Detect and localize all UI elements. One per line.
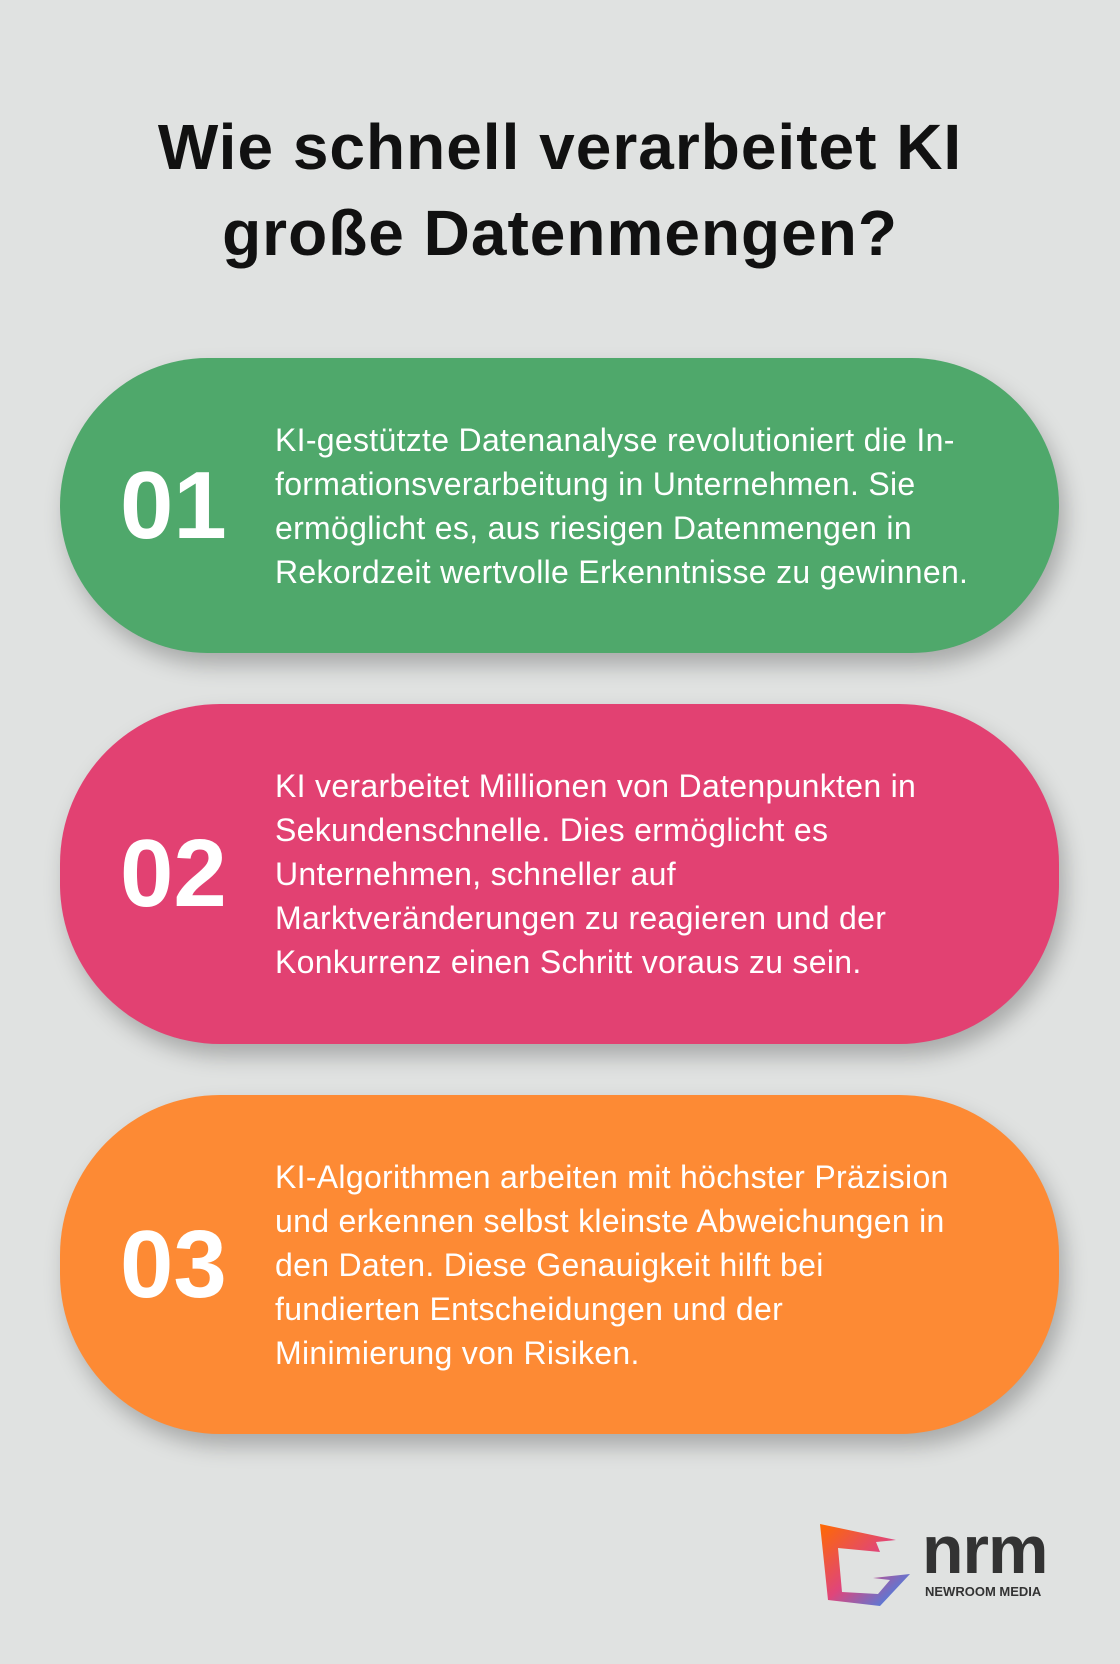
text 03: den Daten. Diese Genauigkeit hilft bei [275, 1246, 824, 1282]
text 03: und erkennen selbst kleinste Abweichungen in [275, 1202, 945, 1238]
text 01: KI-gestützte Datenanalyse revolutioniert die In- [275, 422, 955, 458]
number 01: 01 [120, 452, 227, 558]
logo: NEWROOM MEDIA [925, 1584, 1041, 1599]
text 03 [275, 1158, 949, 1370]
text 02: Marktveränderungen zu reagieren und der [275, 900, 886, 936]
panel: 02 [60, 704, 1059, 1044]
title: große Datenmengen? [222, 197, 898, 269]
icon: logo mark [820, 1524, 910, 1606]
text 02 [275, 768, 916, 980]
panel: 03 [60, 1095, 1059, 1434]
text 02: Unternehmen, schneller auf [275, 856, 676, 892]
number 03: 03 [120, 1210, 227, 1318]
title [158, 111, 962, 269]
text 02: Konkurrenz einen Schritt voraus zu sein. [275, 944, 862, 980]
text 03: Minimierung von Risiken. [275, 1334, 640, 1370]
text 02: Sekundenschnelle. Dies ermöglicht es [275, 812, 828, 848]
panel: 01 [60, 358, 1059, 653]
text 03: fundierten Entscheidungen und der [275, 1290, 783, 1326]
title: Wie schnell verarbeitet KI [158, 111, 962, 183]
logo [820, 1512, 1047, 1606]
logo text: nrm [922, 1512, 1047, 1588]
text 01: ermöglicht es, aus riesigen Datenmengen in [275, 510, 912, 546]
number 02: 02 [120, 820, 227, 927]
text 01 [275, 422, 968, 590]
text 01: formationsverarbeitung in Unternehmen. Sie [275, 466, 916, 502]
text 02: KI verarbeitet Millionen von Datenpunkten in [275, 768, 916, 804]
text 03: KI-Algorithmen arbeiten mit höchster Präzision [275, 1158, 949, 1194]
text 01: Rekordzeit wertvolle Erkenntnisse zu gewinnen. [275, 554, 968, 590]
